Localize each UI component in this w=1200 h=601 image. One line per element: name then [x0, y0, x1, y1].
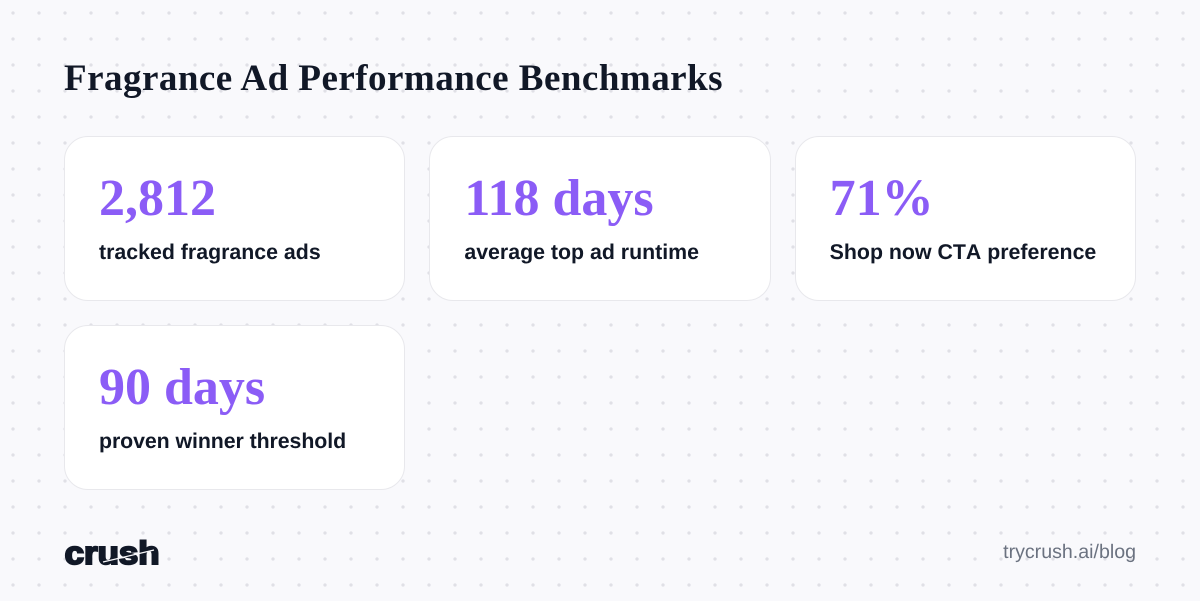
footer url: trycrush.ai/blog: [1003, 541, 1136, 563]
stat label: tracked fragrance ads: [99, 240, 321, 264]
title: Fragrance Ad Performance Benchmarks: [64, 58, 723, 99]
panel: average runtime: [429, 136, 771, 301]
stat label: average top ad runtime: [464, 240, 699, 264]
stat value: 90 days: [99, 359, 265, 416]
stat label: proven winner threshold: [99, 429, 346, 453]
panel: tracked ads: [64, 136, 405, 301]
panel: winner threshold: [64, 325, 405, 490]
stat value: 2,812: [99, 170, 216, 227]
panel: CTA preference: [795, 136, 1136, 301]
stat value: 118 days: [464, 170, 654, 227]
stat value: 71%: [830, 170, 934, 227]
stat label: Shop now CTA preference: [830, 240, 1096, 264]
